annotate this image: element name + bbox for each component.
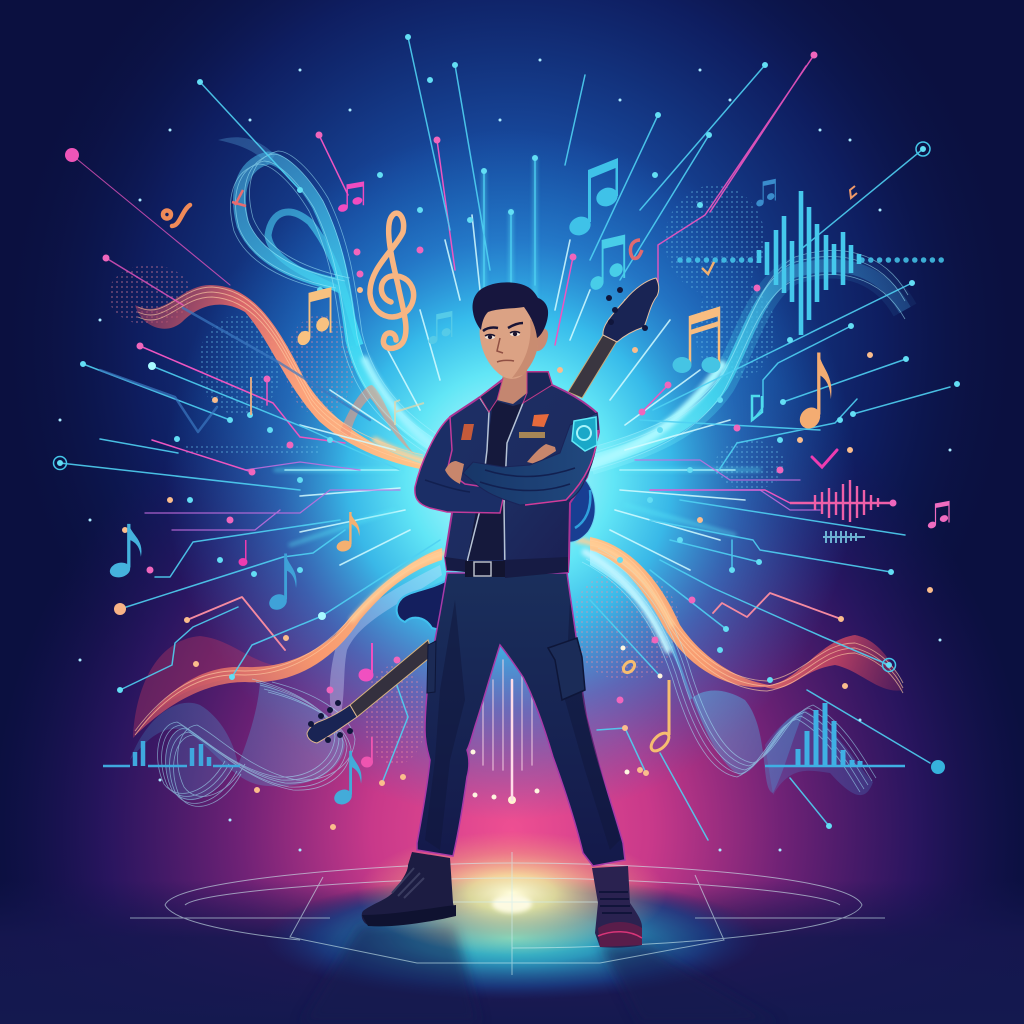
arm on top (463, 413, 598, 505)
jacket zipper lines (465, 398, 523, 572)
face shadow (512, 320, 538, 378)
waveform: mid right (790, 480, 890, 522)
pink dots (106, 55, 893, 700)
ribbon: blue lower left (130, 682, 345, 786)
chest patch orange (532, 414, 549, 427)
ear (536, 329, 548, 351)
large end dots (72, 155, 938, 767)
radial lines and traces (60, 37, 950, 840)
note: cyan beamed top (566, 158, 621, 239)
head (473, 282, 548, 379)
side strap (427, 641, 436, 693)
guitar neck lower (350, 640, 433, 717)
central light burst (275, 158, 760, 570)
note: pink and cyan dots note (250, 377, 252, 415)
note: orange single right (797, 353, 831, 432)
note: orange single middle (335, 512, 360, 553)
accent: orange bracket (850, 186, 857, 198)
t-shirt (467, 400, 523, 560)
ribbon orange strands (135, 287, 903, 735)
eyebrows (483, 323, 523, 331)
equalizer: bottom left (103, 741, 240, 766)
pink rim on sleeve (525, 430, 598, 505)
scattered dots (54, 37, 957, 850)
note: orange small top (232, 190, 246, 206)
tiny dots (60, 60, 950, 850)
note: orange ring lower right (621, 659, 672, 754)
note: orange beamed left (296, 289, 331, 348)
sound ribbons (130, 137, 908, 806)
cyan dots (60, 37, 957, 826)
guitar (307, 278, 659, 743)
accent: tick mark right (812, 450, 837, 467)
accent: red glyph upper right (630, 240, 642, 258)
guitar body lower (397, 580, 448, 632)
cargo pocket (548, 638, 585, 700)
equalizer: bottom right (765, 703, 905, 766)
stage floor (130, 831, 885, 1024)
floor lines (130, 852, 885, 975)
glowing dot below legs (508, 796, 516, 804)
note: orange and cyan beamed right (672, 308, 720, 373)
note: cyan single left (107, 524, 141, 580)
floor shadows (300, 925, 780, 1024)
spotlight (357, 831, 667, 955)
name tag (519, 432, 545, 438)
ribbon: orange lower left (133, 548, 442, 738)
trousers (417, 573, 625, 866)
note: cyan bottom (332, 751, 362, 807)
peach polylines (187, 593, 841, 650)
chest patch left (461, 424, 474, 440)
belt and hem (445, 557, 568, 578)
bright ribbon cores (352, 360, 722, 650)
neck (497, 365, 527, 404)
white glints (459, 648, 660, 797)
boot left (362, 852, 456, 926)
ribbon: blue lower right far (765, 710, 873, 795)
dotted data patches (108, 185, 785, 765)
face (480, 305, 538, 379)
ribbon: orange lower left hump (133, 636, 290, 738)
jacket body (440, 372, 599, 572)
vertical light beams between legs (483, 660, 532, 800)
ribbon: orange lower right (590, 537, 903, 691)
treble clef (370, 213, 414, 348)
circuit traces (145, 460, 820, 530)
guitar body swirl (575, 490, 590, 528)
note: pink lower (358, 643, 374, 682)
ribbon: whitish lower left strand (330, 565, 442, 735)
note: pink far right (927, 502, 949, 530)
note: pink tiny (361, 737, 373, 768)
arm underneath (415, 417, 505, 513)
guitar body upper (566, 477, 595, 542)
music notes (107, 158, 949, 807)
note: cyan small beamed (589, 236, 624, 292)
trouser shading (425, 600, 620, 850)
guitar neck upper (568, 335, 617, 398)
collar (480, 372, 552, 412)
bright cyan glow dots (152, 366, 322, 616)
ribbon: blue lower right (590, 548, 805, 793)
waveform: top right (680, 191, 942, 335)
ribbon: faint upper tail (218, 137, 275, 165)
guitar headstock lower (307, 705, 357, 743)
hand left (445, 461, 464, 484)
cyan rays (60, 37, 950, 840)
floor glow (262, 876, 762, 1000)
ribbon: cyan upper right (590, 266, 905, 462)
dim blue traces (100, 308, 370, 432)
accent: orange tick (702, 262, 714, 274)
hair (473, 282, 548, 338)
note: cyan near head (427, 312, 452, 346)
ribbon: orange upper left (135, 285, 425, 470)
pink rays (72, 55, 893, 503)
orange dots (125, 290, 930, 827)
small data bars: mid right (823, 531, 865, 543)
note: tan faint (395, 400, 424, 425)
ribbon: cyan upper left (240, 158, 440, 450)
note: pink small lower (238, 540, 248, 566)
ribbon: orange small loop (340, 385, 415, 455)
sleeve folds (425, 468, 575, 492)
musician (362, 282, 642, 948)
shoulder badge (572, 417, 597, 451)
nose and mouth (497, 338, 514, 362)
note: orange small left (163, 205, 190, 226)
ring dots (54, 142, 930, 672)
note: faint right top (755, 180, 775, 208)
note: cyan right outlined (752, 396, 762, 420)
boot right (592, 866, 642, 948)
note: cyan lower left (267, 554, 297, 613)
eyes (485, 332, 520, 339)
hand right (527, 444, 556, 464)
ribbon: blue lower left loop (166, 728, 233, 800)
ribbon mesh lines (158, 151, 908, 806)
note: pink top left (337, 182, 364, 213)
guitar headstock upper (603, 278, 659, 342)
tuning pegs (308, 287, 648, 743)
